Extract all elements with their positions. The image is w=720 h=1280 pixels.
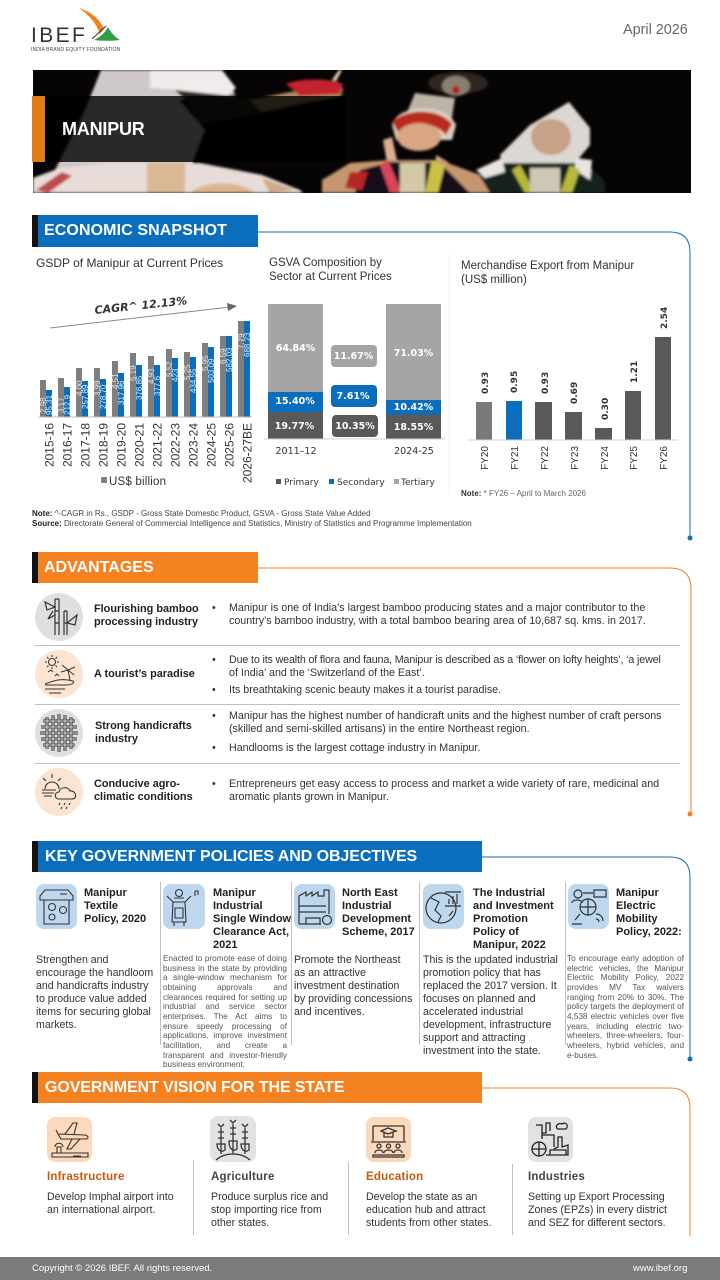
bullet text [212, 654, 661, 679]
bar chart: GSDP: US$ billion [109, 476, 166, 488]
heading [94, 603, 199, 628]
body: Develop Imphal airport into [47, 1190, 174, 1202]
heading: and Investment [473, 900, 554, 912]
bar chart: GSDP: 582.03 [225, 347, 234, 372]
bar chart: GSDP: 2021-22 [150, 423, 164, 467]
row: tourism [35, 650, 661, 698]
bar chart: merchandise export: FY20 [480, 446, 491, 470]
row: handicrafts: Manipur has the highest number of handicraft units and the highest number of craft persons [229, 710, 662, 722]
date: April 2026 [623, 22, 688, 38]
icon: weave [35, 709, 83, 757]
heading [342, 887, 415, 938]
row: tourism: • [212, 684, 216, 696]
chart title: GSVA [269, 257, 392, 283]
bar chart: GSDP: 377.6 [153, 375, 162, 396]
icon: airplane [47, 1117, 92, 1162]
body: Enacted to promote ease of doing business in the state by providing a single-window mechanism for obtaining approvals and clearances required for setting up industrial and service sector enterprises. The Act aims to ensure speedy processing of applications, improve investment facilitation, and create a transparent and investor-friendly business environment. [163, 954, 287, 1069]
bar chart: GSDP: 5.19 [129, 365, 138, 381]
heading: Policy, 2022: [616, 926, 682, 938]
bullet text [212, 602, 646, 627]
heading [213, 887, 291, 951]
heading [616, 887, 682, 938]
bullet text: • [212, 778, 216, 790]
heading [95, 720, 192, 745]
heading [84, 887, 146, 925]
icon: person [163, 884, 205, 929]
bar chart: GSDP: 257.89 [81, 384, 90, 409]
stacked chart: GSVA: 2024-25 [394, 446, 434, 457]
heading: Industries [528, 1171, 585, 1183]
source notes [32, 509, 472, 528]
bar chart: merchandise export: FY24 [600, 446, 611, 470]
heading: Electric [616, 900, 656, 912]
footer: Copyright © 2026 IBEF. All rights reserved. [32, 1263, 212, 1274]
heading: Education [366, 1171, 423, 1183]
bar chart: GSDP: 2016-17 [60, 423, 74, 467]
footer [0, 1257, 720, 1280]
body: and handicrafts industry [36, 980, 148, 992]
CAGR arrow: CAGR^ 12.13% [94, 294, 188, 317]
icon: globe chart [423, 884, 464, 929]
stacked chart: GSVA: Tertiary [400, 478, 435, 488]
icon: textile [36, 884, 77, 929]
row: bamboo: country’s bamboo industry, with a total bamboo bearing area of 10,687 sq. kms. in 2017. [229, 615, 646, 627]
body: Strengthen and [36, 954, 108, 966]
logo: IBEF [31, 8, 120, 53]
heading: Textile [84, 900, 118, 912]
heading [473, 887, 554, 951]
heading: Conducive agro- [94, 778, 180, 790]
body [528, 1190, 667, 1230]
policy 4: promotion [423, 884, 558, 1057]
row: handicrafts: • [212, 742, 216, 754]
bar chart: GSDP: 4.00 [75, 380, 84, 396]
body: investment destination [294, 980, 399, 992]
heading: Infrastructure [47, 1171, 125, 1183]
stacked chart: GSVA: 7.61% [337, 391, 370, 402]
body [47, 1190, 174, 1216]
banner title box [32, 96, 346, 162]
bar chart: merchandise export: 0.93 [481, 372, 491, 394]
heading: Industrial [213, 900, 263, 912]
bar chart: GSDP: 2026-27BE [240, 423, 254, 483]
row: tourism: of India’ and the ‘Switzerland of the East’. [229, 667, 425, 679]
body: focuses on planned and [423, 993, 536, 1005]
heading: Flourishing bamboo [94, 603, 199, 615]
heading: North East [342, 887, 398, 899]
bullet text: • [212, 710, 216, 722]
bar chart: GSDP: 4.93 [147, 368, 156, 384]
bar chart: GSDP: 7.79 [237, 333, 246, 349]
body: investment into the state. [423, 1045, 541, 1057]
bar chart: GSDP: 212.9 [63, 394, 72, 415]
chart title: merchandise export: Merchandise Export from Manipur [461, 260, 634, 272]
bar chart: GSDP: 3.17 [57, 397, 66, 413]
section header: government vision [32, 1072, 482, 1103]
icon: crops [210, 1116, 256, 1162]
heading: Strong handicrafts [95, 720, 192, 732]
heading: Agriculture [211, 1171, 275, 1183]
body: items for securing global [36, 1006, 151, 1018]
vision: infrastructure [47, 1117, 174, 1216]
icon: sun and rain [35, 768, 83, 816]
stacked chart: GSVA: 2011–12 [275, 446, 317, 457]
chart title: GSVA: Sector at Current Prices [269, 271, 392, 283]
stacked chart: GSVA: Primary [284, 478, 319, 488]
body: To encourage early adoption of electric vehicles, the Manipur Electric Mobility Policy, 2022 provides MV Tax waivers ranging from 20% to 30%. The policy targets the deployment of 4,538 electric vehicles over five years, including electric two-wheelers, three-wheelers, four-wheelers, hybrid vehicles, and e-buses. [567, 954, 684, 1060]
bar chart: GSDP: 2019-20 [114, 423, 128, 467]
banner photo: Manipuri dancers [33, 70, 691, 193]
body: education hub and attract [366, 1204, 486, 1216]
bar chart: GSDP: 423 [171, 368, 180, 382]
row: handicrafts [35, 709, 662, 757]
body: This is the updated industrial [423, 954, 558, 966]
logo: IBEF: INDIA BRAND EQUITY FOUNDATION [31, 47, 120, 53]
heading: climatic conditions [94, 791, 193, 803]
bar chart: merchandise export: FY26 [659, 446, 670, 470]
bar chart: GSDP: 2025-26 [222, 423, 236, 467]
bar chart: GSDP: 503.09 [207, 358, 216, 383]
policy 5: electric mobility [567, 884, 684, 1060]
stacked chart: GSVA: Secondary [337, 478, 385, 488]
heading: industry [95, 733, 138, 745]
body: Zones (EPZs) in every district [528, 1204, 667, 1216]
heading: Single Window [213, 913, 291, 925]
icon: classroom [366, 1117, 411, 1162]
bar chart: merchandise export: FY25 [629, 446, 640, 470]
source notes: Note: ^-CAGR in Rs., GSDP - Gross State Domestic Product, GSVA - Gross State Value Added [32, 509, 371, 518]
banner title box: MANIPUR [62, 119, 145, 139]
row: handicrafts: Handlooms is the largest cottage industry in Manipur. [229, 742, 480, 754]
row: climate: aromatic plants grown in Manipur. [229, 791, 389, 803]
body [294, 954, 412, 1018]
body: Setting up Export Processing [528, 1190, 665, 1202]
bar chart: GSDP: 2024-25 [204, 423, 218, 467]
heading: processing industry [94, 616, 198, 628]
stacked chart: GSVA: 15.40% [275, 396, 315, 407]
bar chart: GSDP: 2020-21 [132, 423, 146, 467]
heading: Clearance Act, [213, 926, 289, 938]
vision: agriculture [210, 1116, 328, 1228]
row: bamboo: Manipur is one of India’s largest bamboo producing states and a major contributor to the [229, 602, 645, 614]
stacked chart: GSVA: 18.55% [394, 422, 434, 433]
section header: advantages: ADVANTAGES [44, 559, 154, 576]
bar chart: merchandise export: FY21 [510, 446, 521, 470]
body: other states. [211, 1216, 269, 1228]
body: Promote the Northeast [294, 954, 401, 966]
chart title: merchandise export: (US$ million) [461, 274, 527, 286]
bar chart: GSDP: 2015-16 [42, 423, 56, 467]
heading [94, 778, 193, 803]
policy 3: north east [294, 884, 415, 1018]
body: promotion policy that has [423, 967, 541, 979]
row: tourism: Due to its wealth of flora and fauna, Manipur is described as a ‘flower on lofty heights’, ‘a jewel [229, 654, 661, 666]
body: Develop the state as an [366, 1190, 477, 1202]
bar chart: GSDP: 317.96 [117, 380, 126, 405]
body: encourage the handloom [36, 967, 153, 979]
heading: Industrial [342, 900, 392, 912]
body: support and attracting [423, 1032, 525, 1044]
icon: industry [528, 1117, 573, 1162]
bar chart: merchandise export: FY22 [540, 446, 551, 470]
vision: industries [528, 1117, 673, 1227]
section header: economic snapshot [32, 215, 258, 247]
heading: Promotion [473, 913, 528, 925]
heading: Policy of [473, 926, 519, 938]
bar chart: GSDP: 2018-19 [96, 423, 110, 467]
section header: economic snapshot: ECONOMIC SNAPSHOT [44, 222, 227, 239]
bullet text [212, 778, 659, 803]
bullet text: • [212, 602, 216, 614]
body: students from other states. [366, 1216, 491, 1228]
icon: beach [35, 650, 83, 698]
stacked chart: GSVA: 19.77% [275, 421, 315, 432]
footer: www.ibef.org [633, 1263, 687, 1274]
bar chart: GSDP: 278.70 [99, 384, 108, 409]
stacked chart: GSVA: 64.84% [276, 343, 316, 354]
body [36, 954, 153, 1031]
heading: The Industrial [473, 887, 545, 899]
heading: Manipur [84, 887, 127, 899]
logo: IBEF: IBEF [31, 24, 87, 47]
body [423, 954, 558, 1057]
source notes: Source: Directorate General of Commercial Intelligence and Statistics, Ministry of Statistics and Programme Implementation [32, 519, 472, 528]
body: by providing concessions [294, 993, 412, 1005]
bar chart: GSDP: 5.25 [183, 364, 192, 380]
bar chart: merchandise export: 0.69 [570, 382, 580, 404]
bullet text: • [212, 654, 216, 666]
row: handicrafts: (skilled and semi-skilled artisans) in the entire Northeast region. [229, 723, 530, 735]
section header: key government policies [32, 841, 482, 872]
bar chart: GSDP: 6.59 [219, 348, 228, 364]
bar chart: GSDP: 688.23 [243, 332, 252, 357]
row: climate [35, 768, 659, 816]
bullet text [212, 710, 662, 735]
policy 1: textile [36, 884, 153, 1031]
heading: A tourist’s paradise [94, 668, 195, 680]
icon: network [568, 884, 609, 929]
icon: factory [294, 884, 335, 929]
bar chart: GSDP: 4.51 [111, 373, 120, 389]
section header: advantages [32, 552, 258, 583]
body [366, 1190, 491, 1230]
bar chart: GSDP: 95.31 [45, 394, 54, 415]
bar chart: merchandise export: 0.93 [541, 372, 551, 394]
bar chart: GSDP: 434.55 [189, 368, 198, 393]
body: as an attractive [294, 967, 366, 979]
policy 2: single window [163, 884, 291, 1069]
bar chart: GSDP: 2.98 [39, 397, 48, 413]
stacked chart: GSVA: 71.03% [394, 348, 434, 359]
bar chart: GSDP: 5.52 [165, 361, 174, 377]
section header: government vision: GOVERNMENT VISION FOR THE STATE [45, 1079, 344, 1096]
chart title: merchandise export [461, 260, 634, 286]
bar chart: merchandise export: 0.30 [601, 398, 611, 420]
row: bamboo [35, 593, 646, 641]
heading: Manipur [616, 887, 659, 899]
body: development, infrastructure [423, 1019, 551, 1031]
stacked chart: GSVA: 10.35% [335, 421, 375, 432]
bar chart: GSDP: 5.95 [201, 355, 210, 371]
row: tourism: Its breathtaking scenic beauty makes it a tourist paradise. [229, 684, 501, 696]
bar chart: merchandise export: 1.21 [630, 361, 640, 383]
bar chart: GSDP: 2023-24 [186, 423, 200, 467]
heading: Manipur, 2022 [473, 939, 546, 951]
heading: Scheme, 2017 [342, 926, 415, 938]
bar chart: merchandise export: 0.95 [510, 371, 520, 393]
heading: Policy, 2020 [84, 913, 146, 925]
vision: education [366, 1117, 501, 1227]
body: to produce value added [36, 993, 147, 1005]
chart title: GSDP: GSDP of Manipur at Current Prices [36, 256, 223, 270]
body: stop importing rice from [211, 1204, 322, 1216]
row: climate: Entrepreneurs get easy access to process and market a wide variety of rare, medicinal and [229, 778, 659, 790]
body: Produce surplus rice and [211, 1190, 328, 1202]
body: accelerated industrial [423, 1006, 523, 1018]
body: and incentives. [294, 1006, 365, 1018]
bar chart: merchandise export: 2.54 [660, 307, 670, 329]
section header: key government policies: KEY GOVERNMENT POLICIES AND OBJECTIVES [45, 848, 417, 865]
stacked chart: GSVA: 10.42% [394, 402, 434, 413]
heading: Development [342, 913, 411, 925]
stacked chart: GSVA: 11.67% [334, 351, 374, 362]
bar chart: merchandise export: FY23 [570, 446, 581, 470]
bar chart: GSDP: 3.99 [93, 380, 102, 396]
bar chart: GSDP: 2022-23 [168, 423, 182, 467]
bar chart: GSDP: 2017-18 [78, 423, 92, 467]
bar chart: GSDP: 376.85 [135, 375, 144, 400]
heading: 2021 [213, 939, 237, 951]
chart title: GSVA: GSVA Composition by [269, 257, 382, 269]
body: and SEZ for different sectors. [528, 1216, 666, 1228]
body [211, 1190, 328, 1230]
heading: Mobility [616, 913, 658, 925]
heading: Manipur [213, 887, 256, 899]
export note: Note: * FY26 – April to March 2026 [461, 488, 586, 498]
icon: bamboo [35, 593, 83, 641]
body: an international airport. [47, 1204, 155, 1216]
body: replaced the 2017 version. It [423, 980, 557, 992]
body: markets. [36, 1019, 77, 1031]
